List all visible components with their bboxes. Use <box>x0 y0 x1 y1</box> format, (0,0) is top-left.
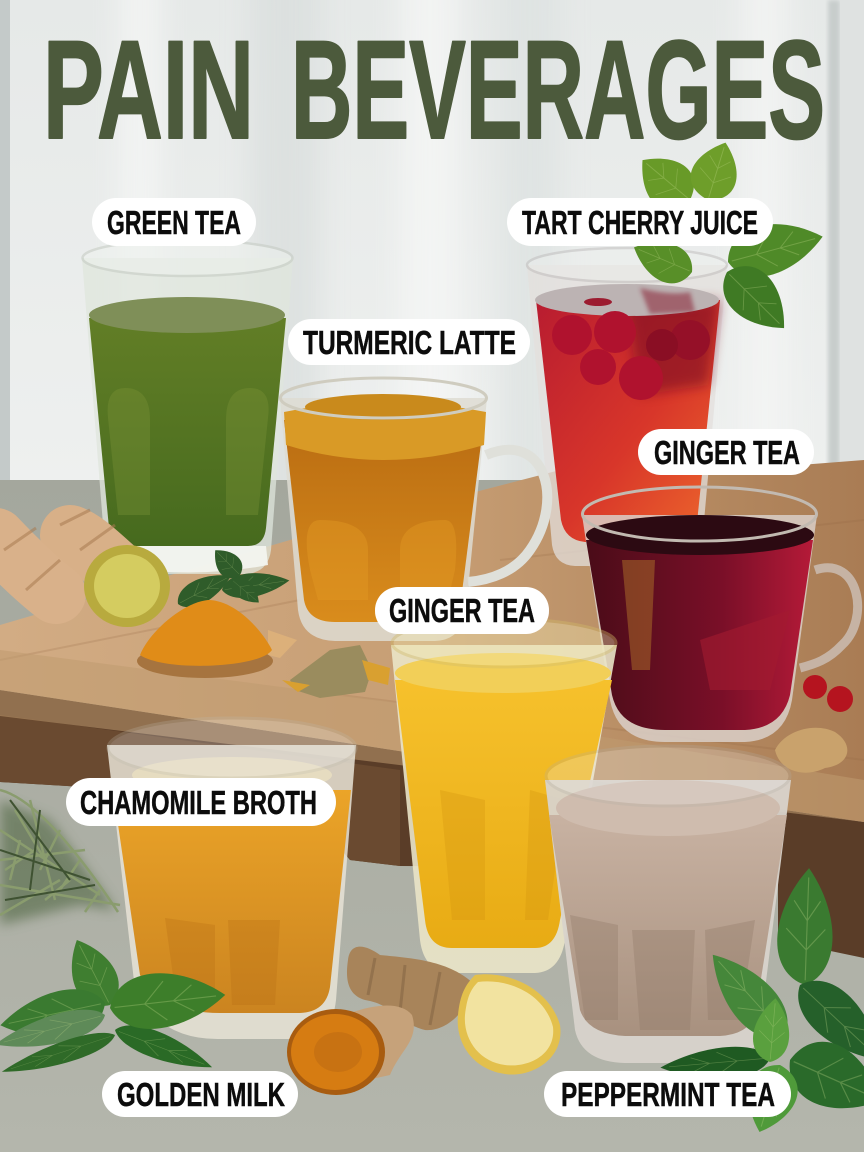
label: tart cherry juice <box>507 198 773 246</box>
prop: herb sprig on board <box>172 542 291 614</box>
label: ginger tea lower <box>375 587 549 634</box>
mug: ginger tea dark <box>582 487 858 742</box>
prop: turmeric root <box>287 1006 414 1095</box>
title <box>43 11 825 168</box>
prop: mint left <box>0 931 228 1083</box>
label: chamomile broth <box>66 778 336 826</box>
title: PAIN <box>43 11 254 168</box>
prop: thyme bundle <box>0 790 120 925</box>
label: ginger tea upper: GINGER TEA <box>654 434 800 471</box>
mug: turmeric latte <box>280 378 547 641</box>
label: golden milk <box>102 1071 298 1117</box>
label: golden milk: GOLDEN MILK <box>117 1076 285 1113</box>
label: peppermint tea: PEPPERMINT TEA <box>561 1076 775 1113</box>
glass: chamomile broth <box>107 718 356 1039</box>
label: ginger tea lower: GINGER TEA <box>389 592 535 629</box>
label: turmeric latte: TURMERIC LATTE <box>303 324 516 361</box>
glass: green tea <box>82 240 293 574</box>
background: table surface <box>0 480 864 1152</box>
prop: mint right <box>659 867 864 1139</box>
label: tart cherry juice: TART CHERRY JUICE <box>522 204 758 241</box>
background: curtain wall <box>0 0 864 540</box>
label: green tea <box>92 198 256 246</box>
label: turmeric latte <box>288 319 530 365</box>
prop: dried ginger pieces <box>282 645 390 698</box>
label: peppermint tea <box>544 1071 791 1117</box>
wooden board <box>0 460 864 958</box>
prop: ginger root left <box>0 510 170 627</box>
prop: ginger root center <box>347 947 475 1030</box>
label: ginger tea upper <box>638 429 814 475</box>
prop: small ginger piece right <box>775 728 847 773</box>
label: green tea: GREEN TEA <box>107 204 241 241</box>
leaves: cherry garnish <box>626 136 829 344</box>
prop: red berries <box>803 675 853 712</box>
label: chamomile broth: CHAMOMILE BROTH <box>80 784 317 821</box>
glass: golden yellow <box>391 619 617 973</box>
prop: lemon-ginger slice <box>458 974 560 1075</box>
glass: peppermint milk tea <box>545 746 791 1063</box>
glass: tart cherry juice <box>527 248 727 566</box>
prop: turmeric powder dish <box>137 600 297 678</box>
